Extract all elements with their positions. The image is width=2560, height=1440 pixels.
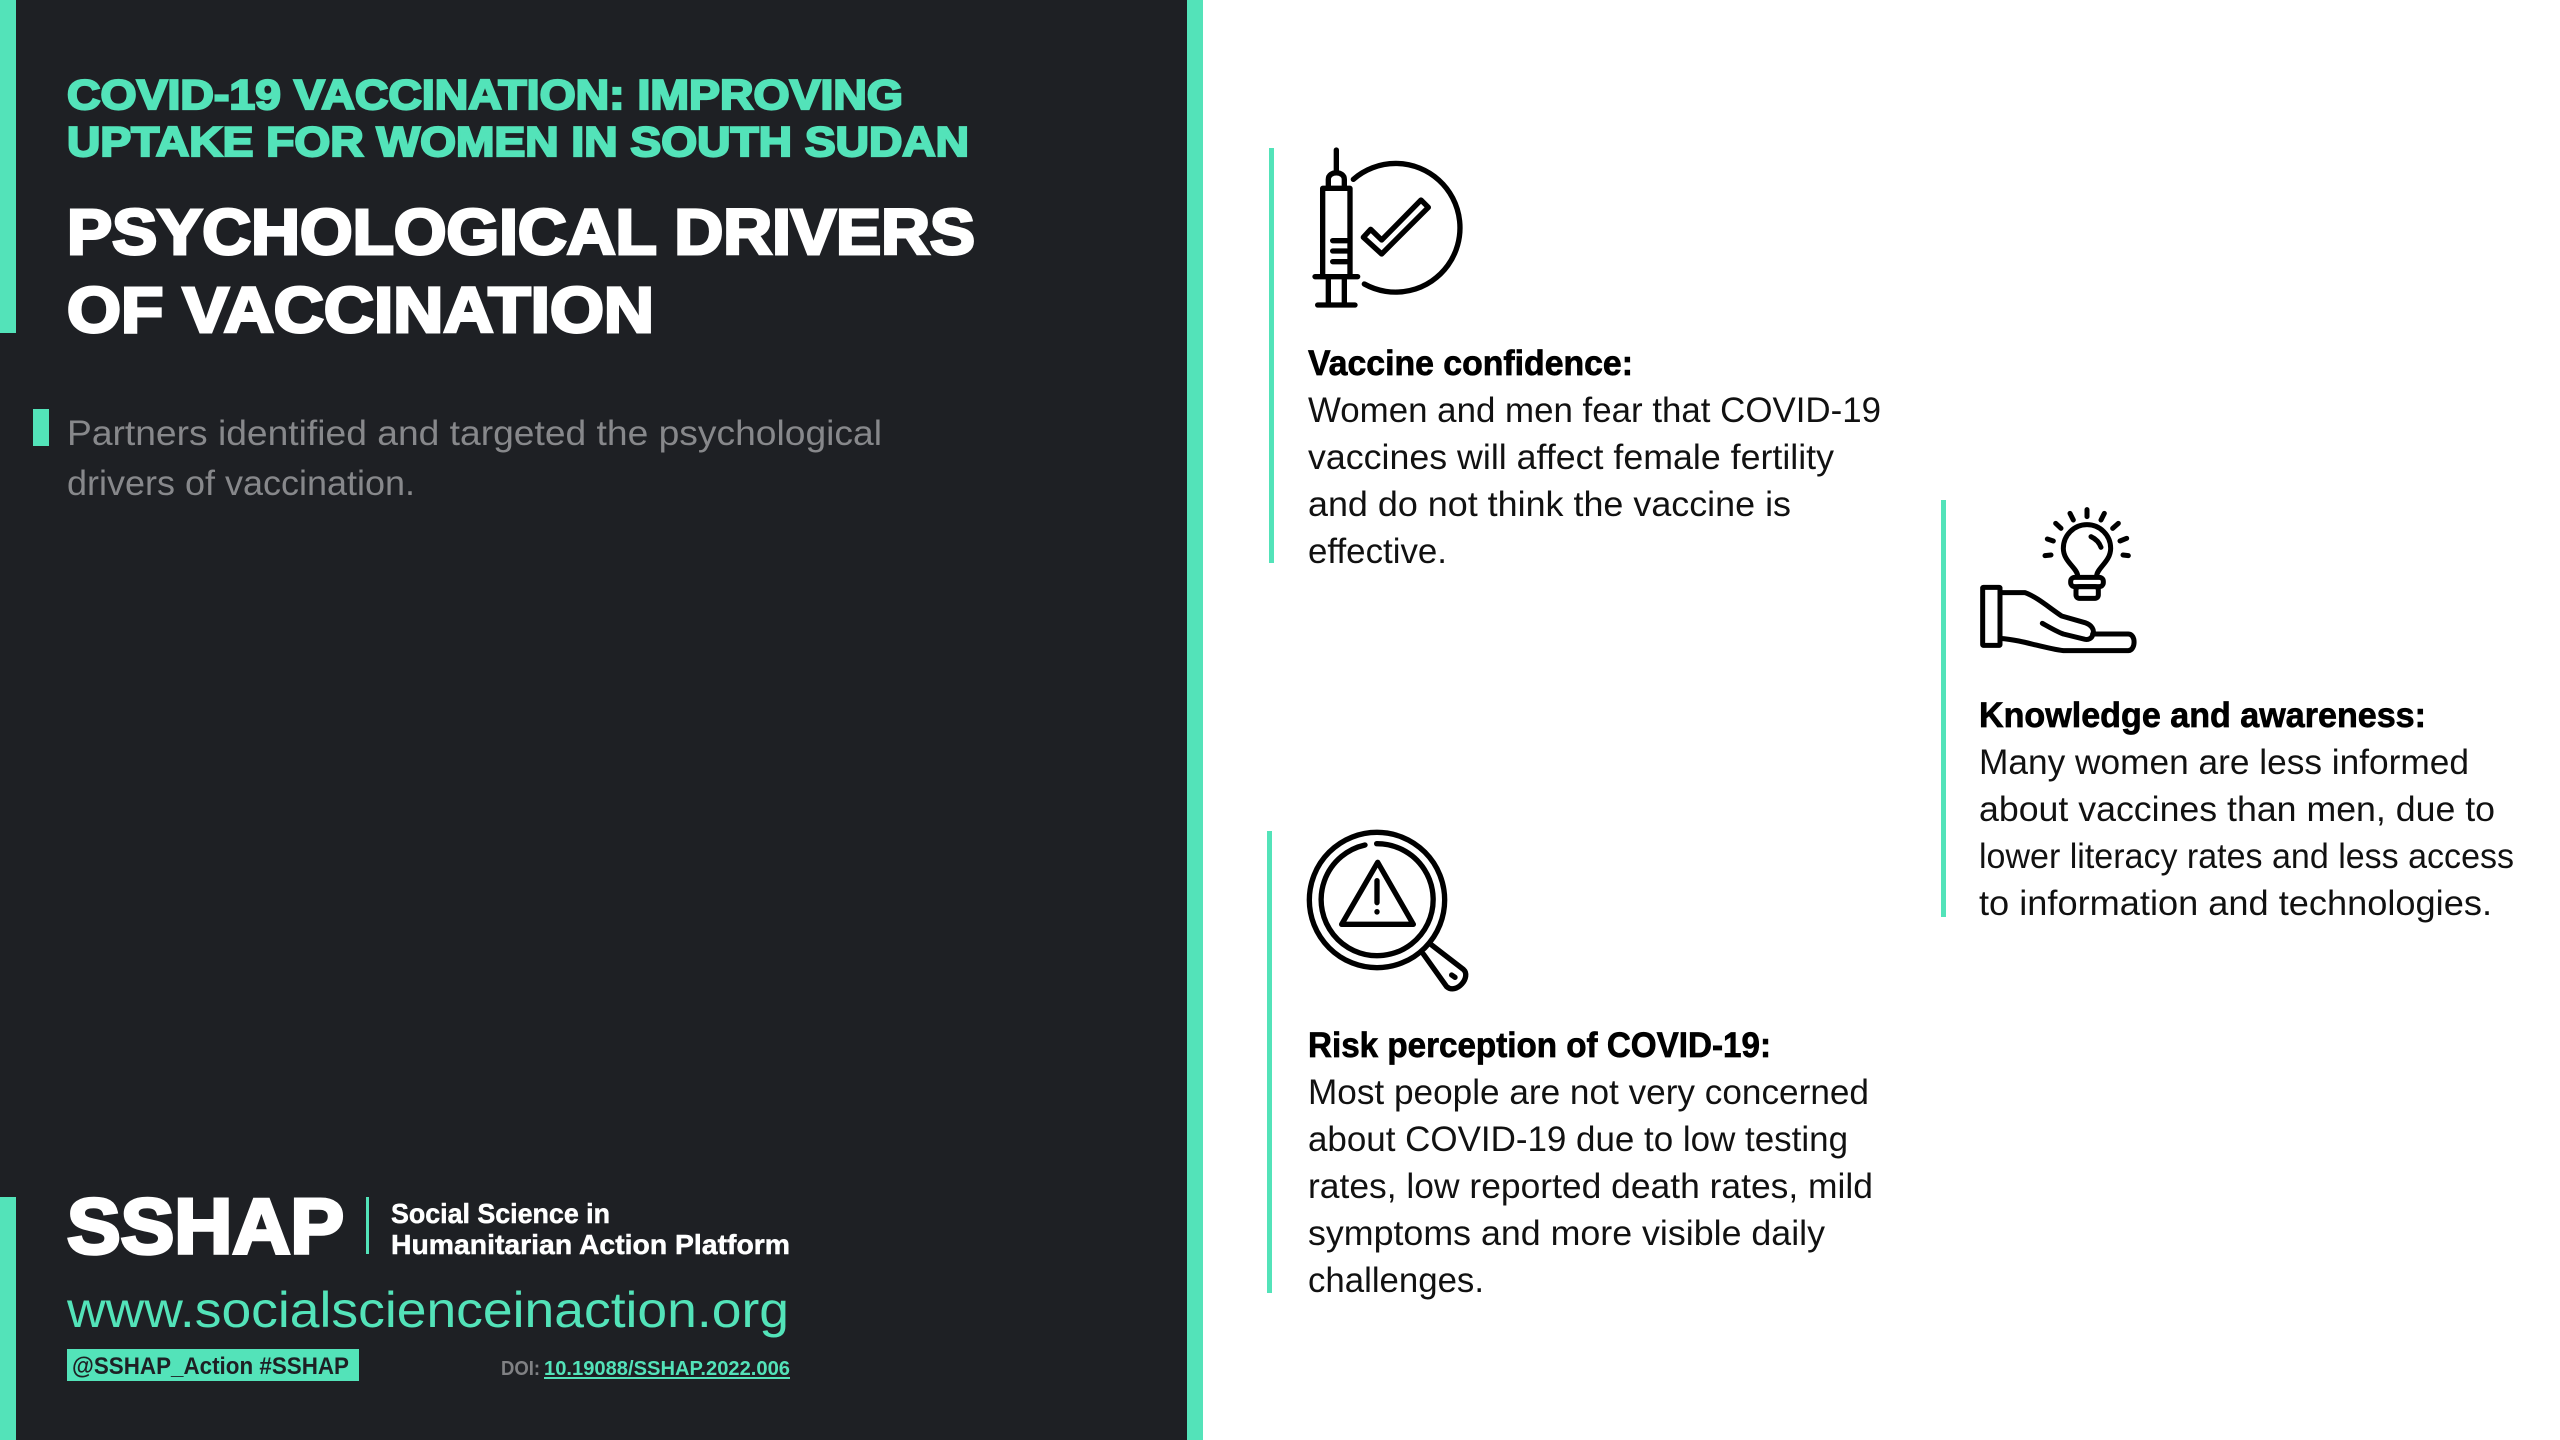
text: vaccine confidence description: Women and men fear that COVID-19 [1308,391,1881,430]
logo: SSHAP: SSHAP [67,1182,344,1270]
text: knowledge and awareness description: lower literacy rates and less access [1979,837,2514,876]
panel: dark left sidebar [0,0,1203,1440]
logo: SSHAP [67,1182,790,1270]
DOI reference: DOI: [501,1358,540,1380]
text: vaccine confidence description: vaccines will affect female fertility [1308,438,1834,477]
heading: report title: COVID-19 VACCINATION: IMPROVING [67,71,903,118]
text: vaccine confidence description: Vaccine confidence: [1308,344,1633,383]
panel: risk perception [1267,831,1873,1300]
text block: introduction [33,409,882,503]
text: vaccine confidence description [1308,344,1881,571]
text: risk perception description: rates, low reported death rates, mild [1308,1167,1873,1206]
heading: report title [67,71,969,165]
text: risk perception description: Most people are not very concerned [1308,1073,1869,1112]
heading: psychological drivers: OF VACCINATION [67,274,654,346]
website url: www.socialscienceinaction.org [66,1282,789,1338]
panel: vaccine confidence [1269,148,1881,571]
text block: introduction: drivers of vaccination. [67,464,415,503]
heading: psychological drivers: PSYCHOLOGICAL DRIVERS [67,196,975,268]
text block: introduction: Partners identified and targeted the psychological [67,414,882,453]
text: risk perception description: Risk perception of COVID-19: [1308,1026,1771,1065]
text: risk perception description: symptoms and more visible daily [1308,1214,1826,1253]
icon: magnifier with warning triangle [1309,832,1466,989]
text: risk perception description [1308,1026,1873,1300]
logo: SSHAP: Social Science in [391,1198,610,1229]
text: risk perception description: about COVID-19 due to low testing [1308,1120,1848,1159]
text: vaccine confidence description: and do not think the vaccine is [1308,485,1791,524]
text: risk perception description: challenges. [1308,1261,1484,1300]
panel: knowledge and awareness [1941,500,2514,923]
text: knowledge and awareness description: to information and technologies. [1979,884,2492,923]
text: knowledge and awareness description: about vaccines than men, due to [1979,790,2495,829]
text: knowledge and awareness description: Knowledge and awareness: [1979,696,2426,735]
DOI reference: 10.19088/SSHAP.2022.006 [544,1358,790,1380]
icon: syringe with check mark [1315,150,1460,305]
text: knowledge and awareness description: Many women are less informed [1979,743,2469,782]
logo: SSHAP: Humanitarian Action Platform [391,1229,790,1260]
social media tag: @SSHAP_Action #SSHAP [72,1353,349,1380]
heading: psychological drivers [67,196,975,346]
icon: hand with light bulb [1983,510,2134,651]
text: vaccine confidence description: effective. [1308,532,1447,571]
text: knowledge and awareness description [1979,696,2514,923]
heading: report title: UPTAKE FOR WOMEN IN SOUTH SUDAN [67,118,969,165]
